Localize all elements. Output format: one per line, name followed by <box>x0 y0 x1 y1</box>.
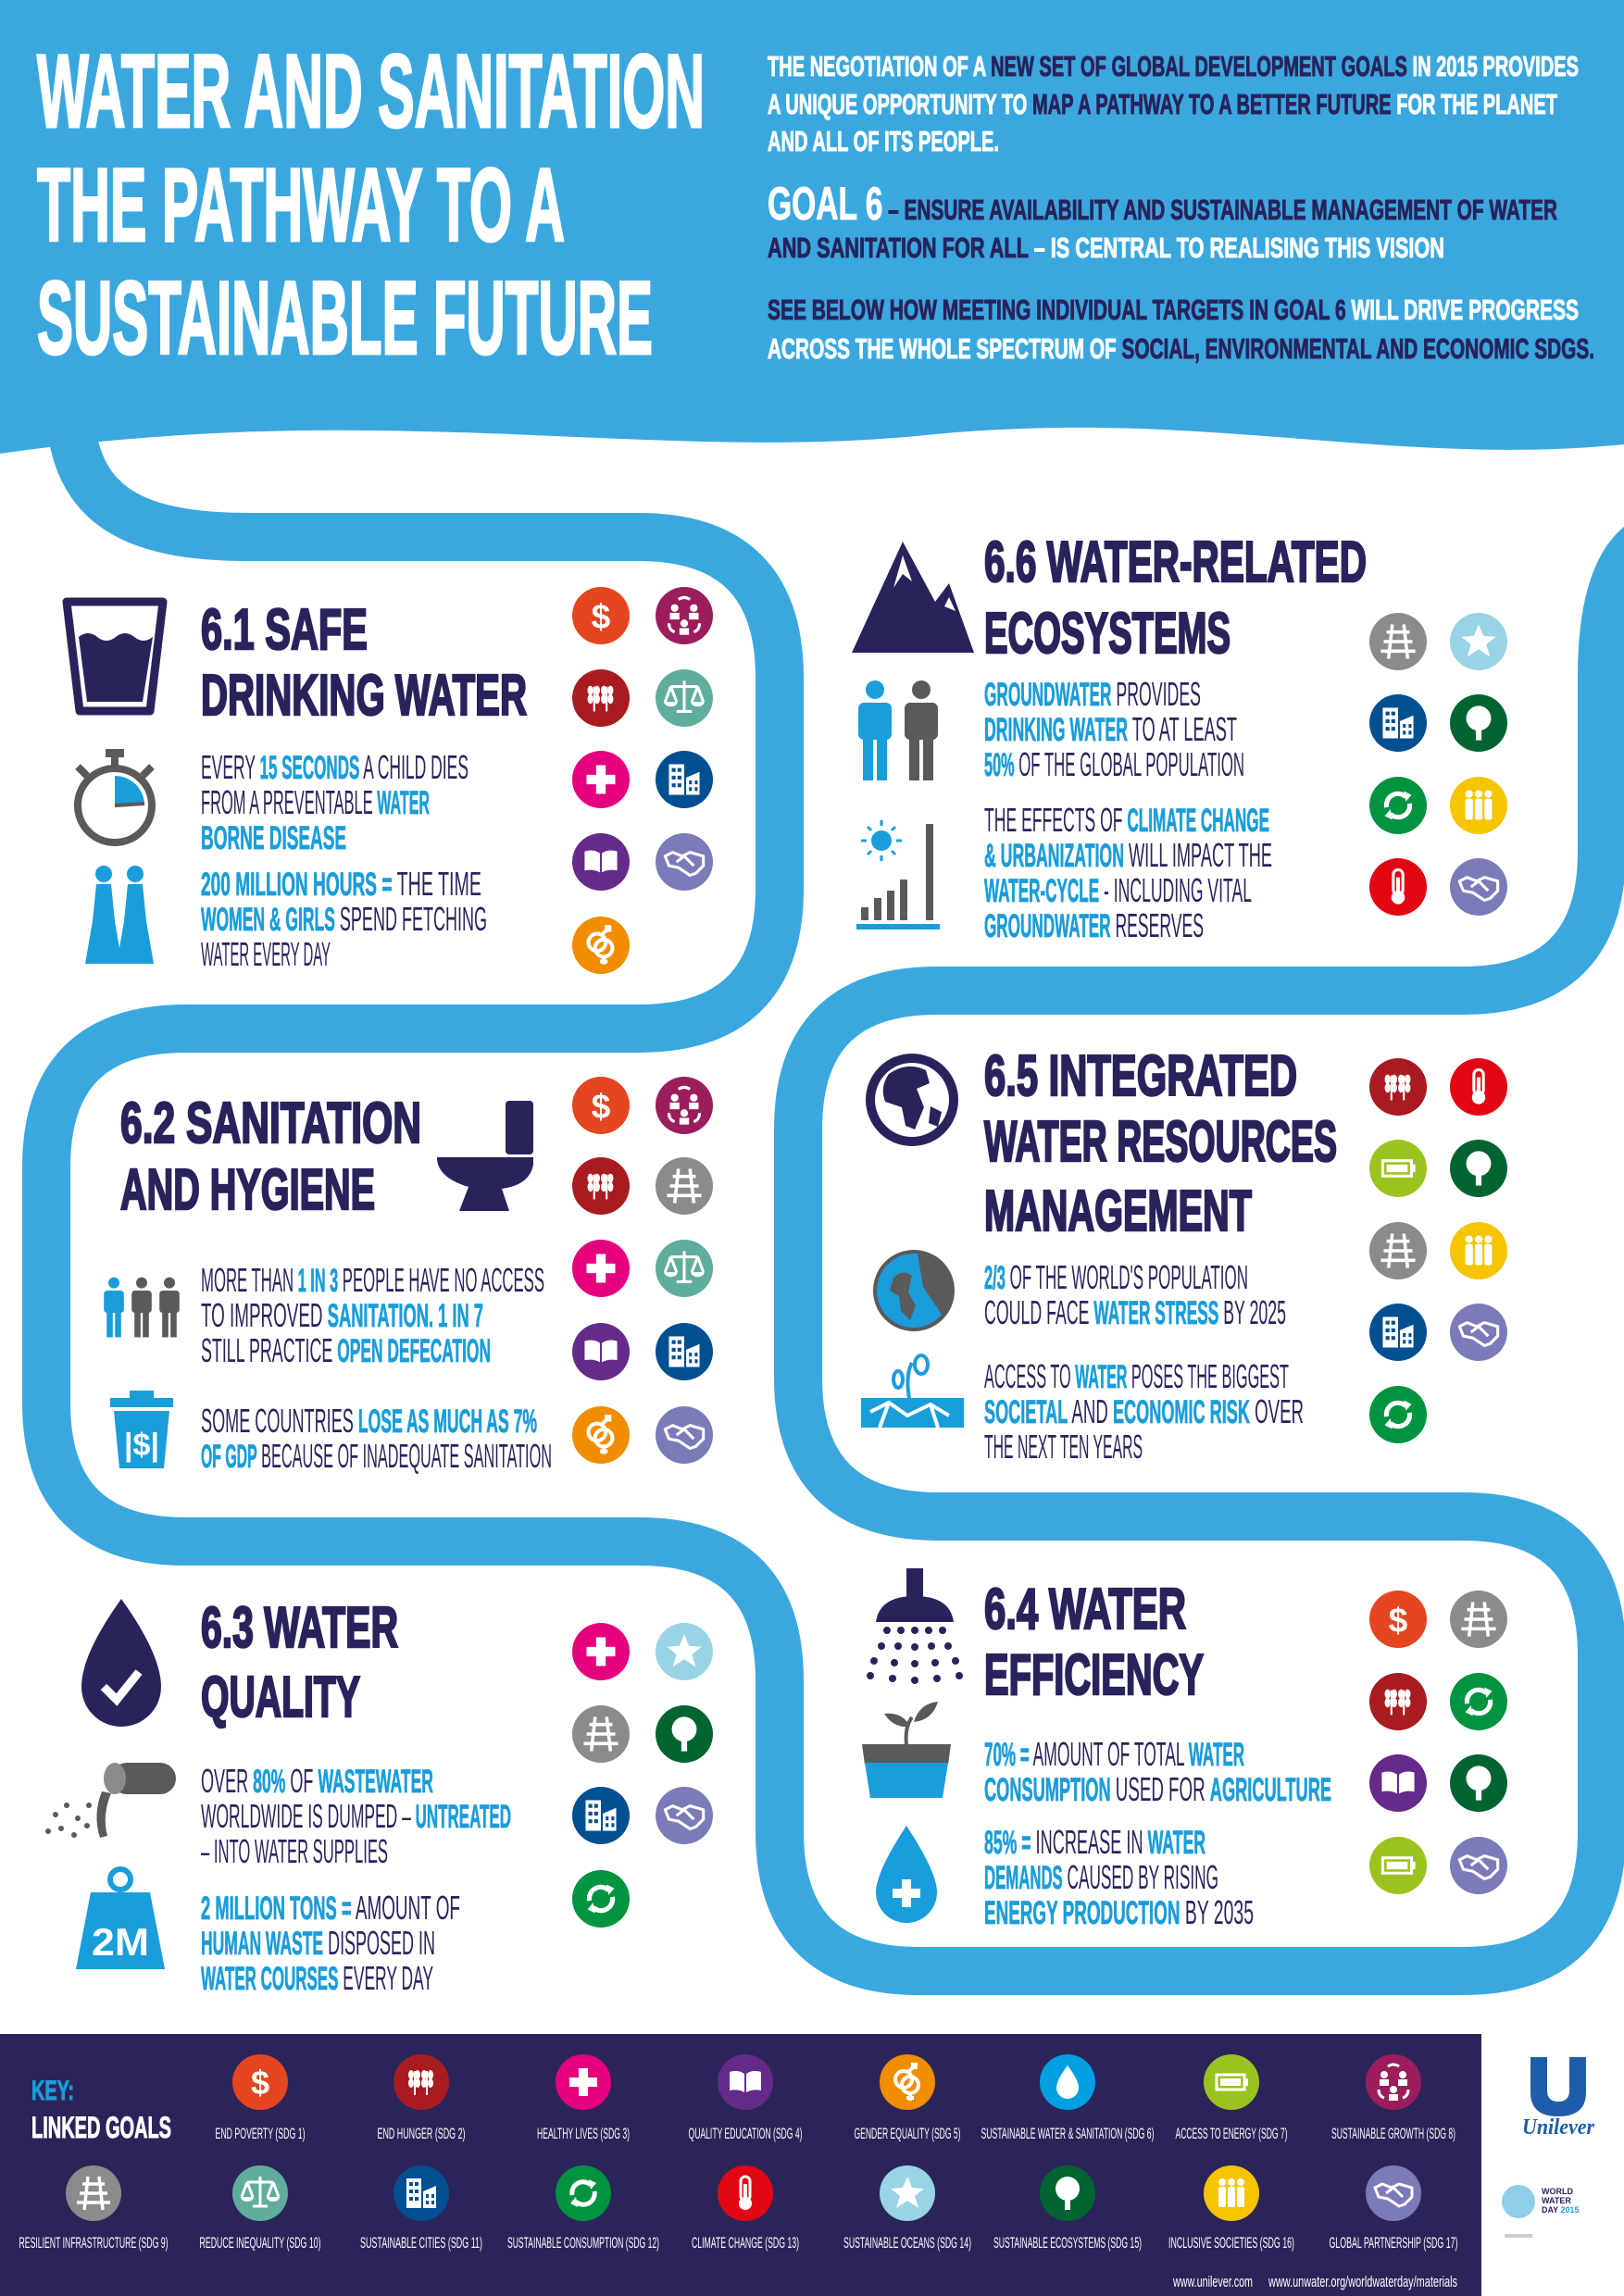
text: 80% wastewater <box>201 1762 511 1870</box>
logo: world water day: DAY 2015 <box>1542 2205 1580 2215</box>
text: climate change: & URBANIZATION WILL IMPACT THE <box>984 836 1272 874</box>
icon: mountains <box>852 542 974 653</box>
text: climate change <box>984 801 1272 944</box>
text: 15 seconds: EVERY 15 SECONDS A CHILD DIES <box>201 748 468 786</box>
intro text: AND SANITATION FOR ALL – IS CENTRAL TO REALISING THIS VISION <box>768 231 1444 264</box>
footer urls: www.unwater.org/worldwaterday/materials <box>1268 2273 1457 2290</box>
text: climate change: WATER-CYCLE - INCLUDING VITAL <box>984 871 1252 909</box>
text: 7% of GDP: SOME COUNTRIES LOSE AS MUCH AS 7% <box>201 1402 537 1440</box>
key row 1: ACCESS TO ENERGY (SDG 7) <box>1176 2125 1287 2142</box>
text: 15 seconds <box>201 748 468 856</box>
heading 6.2: AND HYGIENE <box>120 1158 375 1222</box>
text: 85% energy: ENERGY PRODUCTION BY 2035 <box>984 1893 1254 1931</box>
key row 1: END HUNGER (SDG 2) <box>378 2125 465 2142</box>
key row 2: SUSTAINABLE CITIES (SDG 11) <box>360 2234 482 2252</box>
key row 2: REDUCE INEQUALITY (SDG 10) <box>200 2234 320 2252</box>
icon: 2M weight: 2M <box>92 1920 149 1964</box>
intro text: AND ALL OF ITS PEOPLE. <box>768 125 999 157</box>
heading 6.5: WATER RESOURCES <box>984 1110 1337 1174</box>
text: 2/3 population: 2/3 OF THE WORLD'S POPULATION <box>984 1258 1248 1296</box>
heading 6.6: 6.6 WATER-RELATED <box>984 530 1367 594</box>
key row 2: SUSTAINABLE OCEANS (SDG 14) <box>843 2234 971 2252</box>
icon: earth water stress <box>873 1250 955 1331</box>
heading 6.3 <box>201 1596 398 1729</box>
text: 200 million hours: WOMEN & GIRLS SPEND FETCHING <box>201 900 487 938</box>
text: 70% agriculture <box>984 1735 1331 1808</box>
key row 2 <box>19 2165 1457 2252</box>
icon: drop with tick <box>81 1599 161 1727</box>
title: THE PATHWAY TO A <box>37 147 565 263</box>
icon: two people <box>858 680 938 780</box>
linked goal icons 6.4 <box>1369 1591 1507 1894</box>
heading 6.1: DRINKING WATER <box>201 664 527 728</box>
panel: 6.2 sanitation and hygiene <box>104 1077 713 1475</box>
icon: drop with plus <box>876 1826 937 1923</box>
text: 70% agriculture: 70% = AMOUNT OF TOTAL WATER <box>984 1735 1244 1773</box>
footer key panel <box>0 2034 1481 2296</box>
text: 80% wastewater: WORLDWIDE IS DUMPED – UNTREATED <box>201 1797 511 1835</box>
text: 2 million tons: 2 MILLION TONS = AMOUNT OF <box>201 1889 460 1927</box>
heading 6.4 <box>984 1578 1204 1707</box>
logo: world water day: WATER <box>1542 2196 1571 2205</box>
text: 200 million hours: WATER EVERY DAY <box>201 935 331 973</box>
heading 6.3: QUALITY <box>201 1666 360 1729</box>
heading 6.5: MANAGEMENT <box>984 1179 1252 1243</box>
logo: world water day <box>1502 2185 1580 2238</box>
header background <box>0 0 1624 454</box>
text: 85% energy <box>984 1823 1254 1931</box>
icon: plant pot <box>862 1702 951 1798</box>
heading 6.1: 6.1 SAFE <box>201 598 368 662</box>
linked goal icons 6.2 <box>572 1077 713 1464</box>
text: climate change: GROUNDWATER RESERVES <box>984 906 1204 944</box>
text: societal and economic risk: THE NEXT TEN YEARS <box>984 1428 1143 1466</box>
heading 6.6: ECOSYSTEMS <box>984 602 1230 666</box>
pathway band <box>46 398 1624 1971</box>
icon: sun and bar chart <box>856 820 940 930</box>
text: groundwater <box>984 675 1244 783</box>
key heading: KEY: <box>31 2076 74 2106</box>
icon: money bin: |$| <box>124 1428 159 1463</box>
linked goal icons 6.3 <box>572 1623 713 1928</box>
text: 1 in 3 <box>201 1261 544 1369</box>
text: societal and economic risk: ACCESS TO WATER POSES THE BIGGEST <box>984 1357 1289 1395</box>
heading 6.2 <box>120 1092 421 1222</box>
text: 15 seconds: BORNE DISEASE <box>201 820 346 856</box>
title: SUSTAINABLE FUTURE <box>37 260 653 376</box>
icon: money bin <box>110 1391 173 1468</box>
text: 2 million tons <box>201 1889 460 1997</box>
icon: 2M weight <box>76 1869 165 1969</box>
intro text <box>768 50 1594 365</box>
text: groundwater: DRINKING WATER TO AT LEAST <box>984 710 1237 748</box>
key row 2: SUSTAINABLE CONSUMPTION (SDG 12) <box>507 2234 659 2252</box>
text: groundwater: GROUNDWATER PROVIDES <box>984 675 1201 713</box>
linked goal icons 6.1 <box>572 587 713 974</box>
panel: 6.6 water-related ecosystems: 50% OF THE GLOBAL POPULATION <box>984 745 1244 783</box>
text: 200 million hours <box>201 865 487 973</box>
key row 1: QUALITY EDUCATION (SDG 4) <box>689 2125 802 2142</box>
key row 2: SUSTAINABLE ECOSYSTEMS (SDG 15) <box>993 2234 1142 2252</box>
text: 2/3 population: COULD FACE WATER STRESS BY 2025 <box>984 1293 1286 1331</box>
text: 80% wastewater: – INTO WATER SUPPLIES <box>201 1832 388 1870</box>
text: 85% energy: DEMANDS CAUSED BY RISING <box>984 1858 1218 1896</box>
logo: unilever: Unilever <box>1522 2115 1595 2140</box>
heading 6.4: EFFICIENCY <box>984 1643 1204 1707</box>
heading 6.6 <box>984 530 1367 666</box>
heading 6.1 <box>201 598 527 728</box>
text: 1 in 3: MORE THAN 1 IN 3 PEOPLE HAVE NO ACCESS <box>201 1261 544 1299</box>
intro text: A UNIQUE OPPORTUNITY TO MAP A PATHWAY TO A BETTER FUTURE FOR THE PLANET <box>768 88 1557 120</box>
footer urls <box>1172 2273 1457 2290</box>
text: climate change: THE EFFECTS OF CLIMATE CHANGE <box>984 801 1269 839</box>
text: 200 million hours: 200 MILLION HOURS = THE TIME <box>201 865 481 903</box>
title <box>37 33 705 376</box>
key heading: LINKED GOALS <box>31 2111 171 2144</box>
icon: shower <box>867 1568 963 1684</box>
heading 6.4: 6.4 WATER <box>984 1578 1186 1641</box>
icon: three people <box>104 1278 180 1337</box>
logo: unilever <box>1522 2057 1595 2140</box>
text: 1 in 3: TO IMPROVED SANITATION. 1 IN 7 <box>201 1296 483 1334</box>
text: 2 million tons: HUMAN WASTE DISPOSED IN <box>201 1924 435 1962</box>
key row 2: INCLUSIVE SOCIETIES (SDG 16) <box>1168 2234 1294 2252</box>
text: societal and economic risk <box>984 1357 1304 1466</box>
icon: women carrying water <box>85 866 154 964</box>
key row 1: END POVERTY (SDG 1) <box>215 2125 306 2142</box>
key row 1: GENDER EQUALITY (SDG 5) <box>854 2125 961 2142</box>
text: 2/3 population <box>984 1258 1286 1331</box>
icon: waste pipe <box>45 1763 176 1838</box>
key heading <box>31 2076 171 2144</box>
icon: globe <box>866 1054 958 1146</box>
key row 1: HEALTHY LIVES (SDG 3) <box>537 2125 630 2142</box>
text: 85% energy: 85% = INCREASE IN WATER <box>984 1823 1206 1861</box>
panel: 6.6 water-related ecosystems <box>852 530 1507 944</box>
key row 2: RESILIENT INFRASTRUCTURE (SDG 9) <box>19 2234 169 2252</box>
key row 1: SUSTAINABLE GROWTH (SDG 8) <box>1331 2125 1455 2142</box>
panel: 6.5 integrated water resources management <box>861 1044 1507 1466</box>
panel: 6.4 water efficiency <box>862 1568 1507 1931</box>
text: societal and economic risk: SOCIETAL AND ECONOMIC RISK OVER <box>984 1392 1304 1430</box>
panel: 6.3 water quality <box>45 1596 713 1997</box>
heading 6.3: 6.3 WATER <box>201 1596 398 1660</box>
footer urls: www.unilever.com <box>1172 2273 1253 2290</box>
icon: toilet <box>437 1101 533 1211</box>
key row 2: CLIMATE CHANGE (SDG 13) <box>692 2234 799 2252</box>
text: 7% of GDP <box>201 1402 552 1475</box>
key row 1: SUSTAINABLE WATER & SANITATION (SDG 6) <box>981 2125 1154 2142</box>
text: 80% wastewater: OVER 80% OF WASTEWATER <box>201 1762 433 1800</box>
key row 2: GLOBAL PARTNERSHIP (SDG 17) <box>1330 2234 1457 2252</box>
text: 15 seconds: FROM A PREVENTABLE WATER <box>201 783 430 821</box>
panel: 6.1 safe drinking water <box>67 587 713 974</box>
key row 1 <box>215 2054 1455 2142</box>
icon: glass of water <box>67 602 163 711</box>
panel: 6.2 sanitation and hygiene: OF GDP BECAUSE OF INADEQUATE SANITATION <box>201 1437 552 1475</box>
linked goal icons 6.6 <box>1369 613 1507 916</box>
heading 6.5: 6.5 INTEGRATED <box>984 1044 1297 1108</box>
logo: world water day: WORLD <box>1542 2187 1573 2196</box>
heading 6.2: 6.2 SANITATION <box>120 1092 421 1155</box>
text: 1 in 3: STILL PRACTICE OPEN DEFECATION <box>201 1331 491 1369</box>
icon: seedling on cracked earth <box>861 1355 964 1428</box>
heading 6.5 <box>984 1044 1337 1243</box>
linked goal icons 6.5 <box>1369 1058 1507 1443</box>
title: WATER AND SANITATION <box>37 33 705 149</box>
icon: stopwatch <box>78 749 152 842</box>
text: 2 million tons: WATER COURSES EVERY DAY <box>201 1959 433 1997</box>
text: 70% agriculture: CONSUMPTION USED FOR AGRICULTURE <box>984 1770 1331 1808</box>
